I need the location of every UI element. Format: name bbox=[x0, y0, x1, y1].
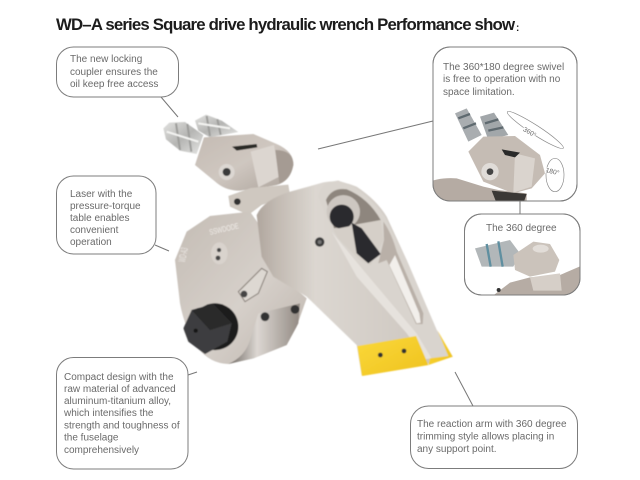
hydraulic wrench illustration bbox=[163, 115, 453, 376]
leader line: laser table bbox=[155, 245, 169, 251]
swivel block bbox=[195, 134, 293, 191]
360 rotation ring: 360° bbox=[522, 125, 538, 139]
callout: compact design: aluminum-titanium alloy, bbox=[64, 396, 171, 407]
reaction arm bbox=[257, 181, 453, 375]
leader line: coupler bbox=[161, 97, 178, 117]
callout: laser table: table enables bbox=[70, 213, 130, 224]
callout: laser table: pressure-torque bbox=[70, 201, 141, 212]
callout: compact design: raw material of advanced bbox=[64, 384, 176, 395]
360 degree photo bbox=[475, 240, 583, 297]
leader line: reaction arm bbox=[455, 372, 473, 406]
leader line: compact design bbox=[188, 372, 197, 375]
oval port plate bbox=[211, 242, 228, 264]
callout: compact design: Compact design with the bbox=[64, 372, 174, 383]
latch bbox=[238, 268, 267, 302]
engraved mark bbox=[177, 221, 240, 263]
callout: compact design: the fuselage bbox=[64, 432, 119, 444]
callout: laser table: Laser with the bbox=[70, 189, 133, 200]
collar bolt bbox=[234, 198, 241, 205]
callout: 360*180 swivel inset: The 360*180 degree swivel bbox=[443, 62, 564, 73]
callout: laser table: operation bbox=[70, 237, 112, 248]
callout: 360 degree inset: The 360 degree bbox=[486, 223, 557, 234]
engraved mark: SSWDODE bbox=[208, 221, 240, 237]
swivel photo bbox=[430, 108, 566, 203]
callout: reaction arm bbox=[410, 406, 578, 468]
callout: compact design: which intensifies the bbox=[63, 408, 154, 419]
hydraulic couplers bbox=[163, 115, 238, 154]
callout: locking coupler bbox=[56, 47, 178, 97]
callout: compact design: comprehensively bbox=[64, 445, 139, 456]
callout: laser table: convenient bbox=[70, 225, 119, 236]
wrench head housing bbox=[175, 212, 307, 364]
callout: 360 degree inset bbox=[464, 214, 583, 297]
housing bolts bbox=[261, 305, 299, 321]
title: WD–A series Square drive hydraulic wrench Performance show bbox=[56, 15, 516, 34]
black square drive bbox=[183, 303, 238, 354]
callout: reaction arm: any support point. bbox=[417, 444, 496, 455]
callout: reaction arm: The reaction arm with 360 degree bbox=[417, 419, 567, 430]
callout: compact design bbox=[56, 358, 188, 469]
swivel collar bbox=[228, 185, 290, 215]
yellow reaction foot bbox=[357, 330, 453, 376]
callout: laser table bbox=[56, 176, 156, 254]
connector between insets bbox=[519, 201, 521, 214]
callout: compact design: strength and toughness of bbox=[64, 420, 180, 432]
callout: 360*180 swivel inset: is free to operation with no bbox=[443, 74, 561, 85]
leader line: swivel bbox=[318, 121, 433, 149]
180 rotation ring: 180° bbox=[545, 166, 560, 177]
chrome lower band bbox=[228, 303, 300, 364]
callout: reaction arm: trimming style allows placing in bbox=[417, 432, 554, 442]
callout: locking coupler: oil keep free access bbox=[70, 79, 158, 90]
callout: 360*180 swivel inset: space limitation. bbox=[443, 87, 515, 98]
engraved mark: WD-A3 bbox=[177, 246, 191, 263]
callout: locking coupler: coupler ensures the bbox=[70, 67, 158, 78]
callout: locking coupler: The new locking bbox=[70, 54, 142, 65]
callout: 360*180 swivel inset bbox=[430, 47, 577, 203]
title: : bbox=[516, 23, 519, 34]
